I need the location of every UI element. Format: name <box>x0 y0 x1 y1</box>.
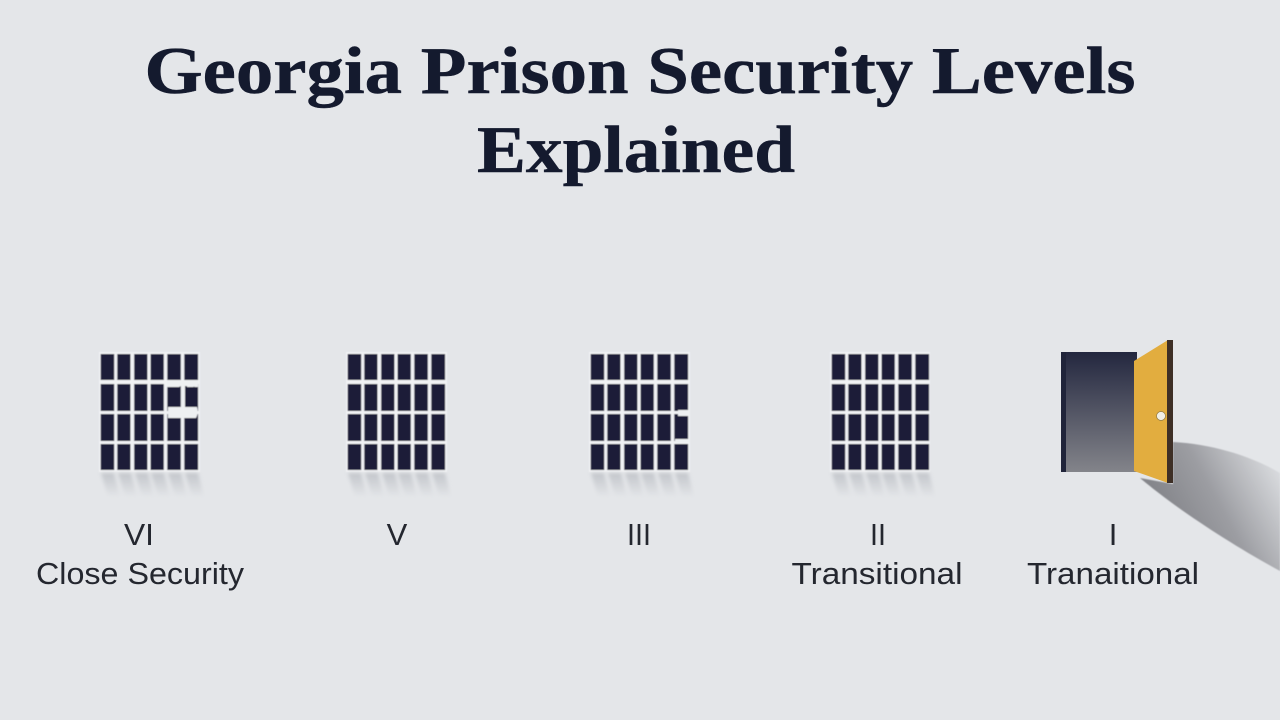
label: VI Close Security: VI <box>124 517 154 552</box>
label: II Transitional: II <box>870 517 886 552</box>
doorway <box>1061 352 1137 472</box>
icon: level VI cell bars <box>99 352 204 497</box>
label: VI Close Security: Close Security <box>36 556 245 591</box>
label: I Tranaitional: Tranaitional <box>1027 556 1199 591</box>
icon: level V cell bars <box>346 352 451 497</box>
icon: level I open door <box>1061 340 1280 571</box>
label: III: III <box>627 517 651 552</box>
label: I Tranaitional: I <box>1109 517 1117 552</box>
label: I Tranaitional <box>1027 517 1199 591</box>
door knob <box>1156 412 1166 420</box>
icon: level II cell bars <box>830 352 935 497</box>
title <box>144 34 1136 187</box>
label: VI Close Security <box>36 517 245 591</box>
door leaf <box>1134 340 1168 483</box>
title: Explained <box>477 113 795 187</box>
title: Georgia Prison Security Levels <box>144 34 1136 108</box>
label: II Transitional: Transitional <box>792 556 962 591</box>
door shadow <box>1140 442 1280 571</box>
label: II Transitional <box>792 517 962 591</box>
label: V: V <box>387 517 408 552</box>
icon: level III cell bars <box>589 352 694 497</box>
